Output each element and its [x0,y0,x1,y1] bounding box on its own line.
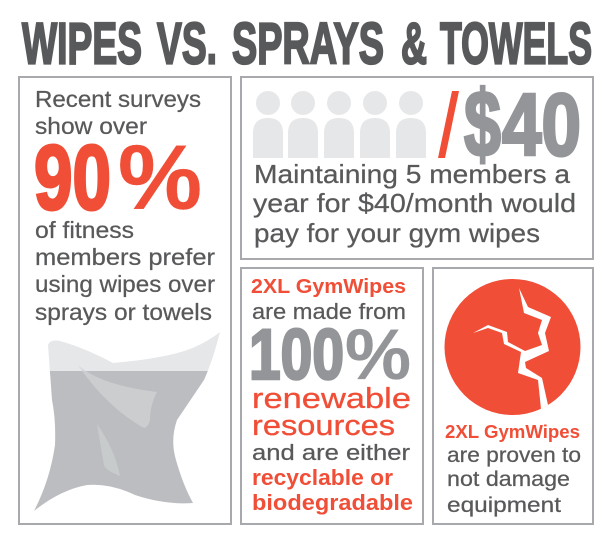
title: & [401,12,427,76]
$40 price: 40 [502,75,581,174]
100% statistic: % [345,316,411,395]
survey result text: using wipes over [35,271,215,297]
icon: wipe [34,332,220,511]
survey result text: of fitness [35,217,134,243]
member cost text [253,159,576,248]
equipment text [447,444,581,517]
title [22,12,592,76]
renewable resources: resources [252,410,395,442]
made from text: are made from [252,299,406,324]
panel: renewable: biodegradable [252,490,413,515]
$40 price: $ [464,71,501,176]
member cost text: year for $40/month would [253,188,576,218]
100% statistic: 100 [249,316,344,395]
panel: member cost [241,71,593,259]
member cost text: pay for your gym wipes [254,218,540,248]
survey result text: sprays or towels [35,299,212,325]
90% statistic: % [118,127,202,229]
panel: renewable [241,268,423,524]
survey intro text: show over [35,113,147,139]
title: WIPES [22,12,142,76]
equipment text: equipment [447,494,561,517]
90% statistic: 90 [34,127,111,229]
member cost text: Maintaining 5 members a [254,159,571,189]
panel: renewable: recyclable or [252,465,393,490]
90% statistic [34,127,202,229]
icon: five members [253,91,426,158]
equipment text: not damage [447,468,570,491]
$40 price [464,71,581,176]
icon: cracked circle [444,279,580,415]
title: SPRAYS [232,12,384,76]
title: VS. [157,12,217,76]
brand name: 2XL GymWipes [251,276,406,298]
brand name: 2XL GymWipes [445,422,580,442]
survey result text: members prefer [35,244,215,270]
equipment text: are proven to [447,444,581,467]
red slash [438,91,459,158]
survey intro text: Recent surveys [35,86,201,112]
survey result text [35,217,215,325]
recyclable text: and are either [252,440,410,465]
panel: equipment [433,268,593,524]
survey intro text [35,86,201,139]
renewable resources [252,383,411,442]
panel: survey [19,77,231,524]
renewable resources: renewable [252,383,411,415]
